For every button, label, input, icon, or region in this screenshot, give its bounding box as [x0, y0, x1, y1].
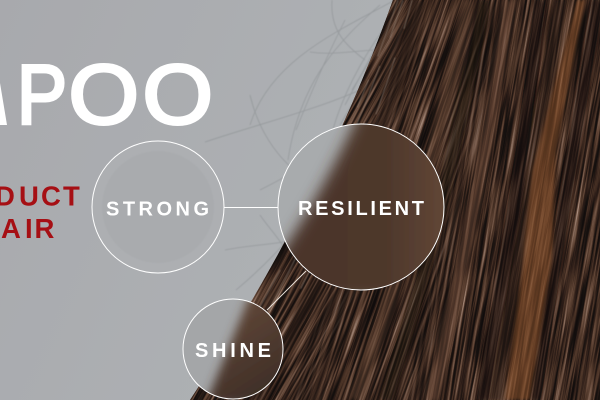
- stray hairs: [190, 0, 400, 378]
- title: P: [17, 48, 67, 141]
- hair light strands: [205, 0, 412, 400]
- title: O: [68, 48, 139, 142]
- title: O: [142, 48, 213, 142]
- title: [0, 48, 213, 142]
- connector: resilient to shine: [267, 271, 306, 310]
- label: shine: SHINE: [195, 340, 271, 362]
- hair texture: [190, 0, 600, 400]
- label: resilient: RESILIENT: [298, 198, 424, 220]
- hair: [190, 0, 600, 400]
- connector: strong to resilient: [224, 206, 278, 208]
- hair orange streak: [505, 0, 585, 400]
- circle: resilient: [278, 124, 444, 290]
- hair tone bands: [255, 0, 598, 400]
- label: strong: STRONG: [106, 198, 209, 220]
- circle: shine: [182, 298, 284, 400]
- circle: strong: [92, 141, 224, 273]
- subtitle: [0, 180, 80, 244]
